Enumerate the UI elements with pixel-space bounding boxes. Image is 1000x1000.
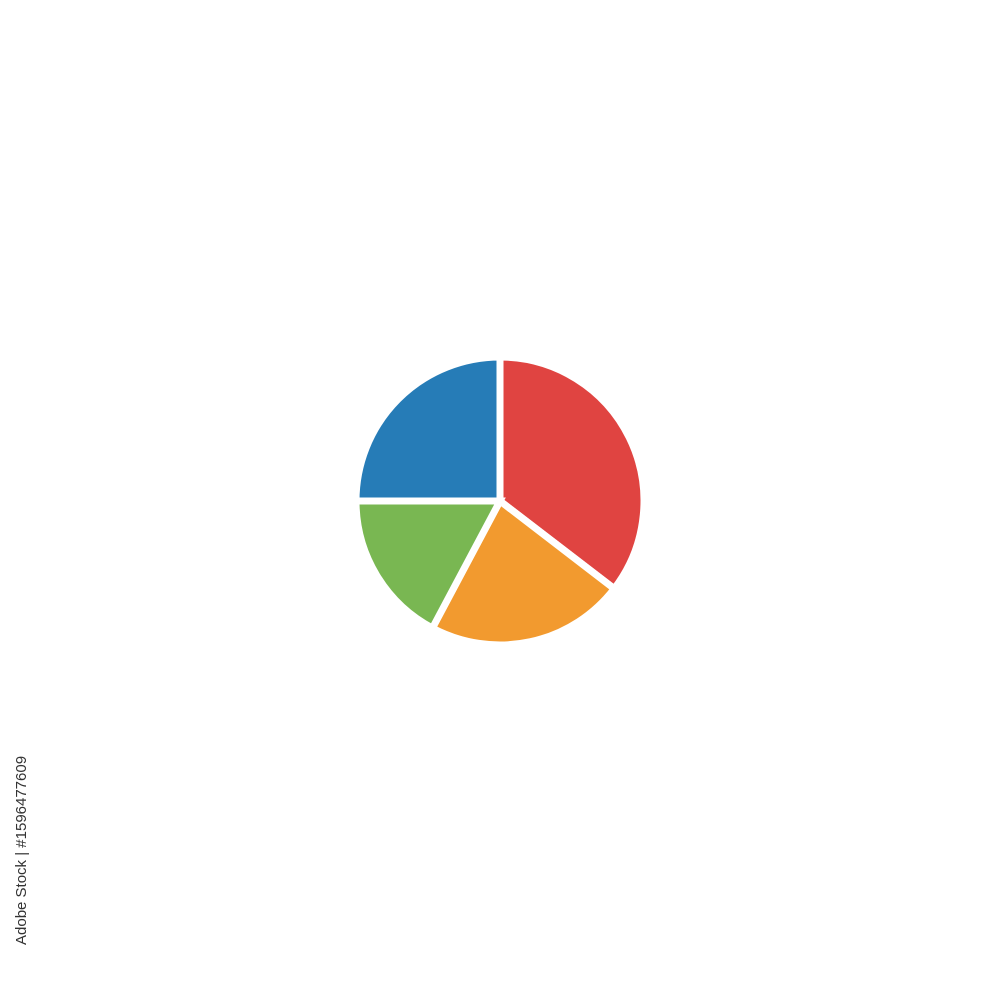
credit text: Adobe Stock | #1596477609 bbox=[13, 756, 30, 945]
slice: red bbox=[500, 357, 644, 589]
slice: blue bbox=[356, 357, 500, 501]
slice: orange bbox=[432, 501, 614, 645]
slice: green bbox=[356, 501, 500, 628]
